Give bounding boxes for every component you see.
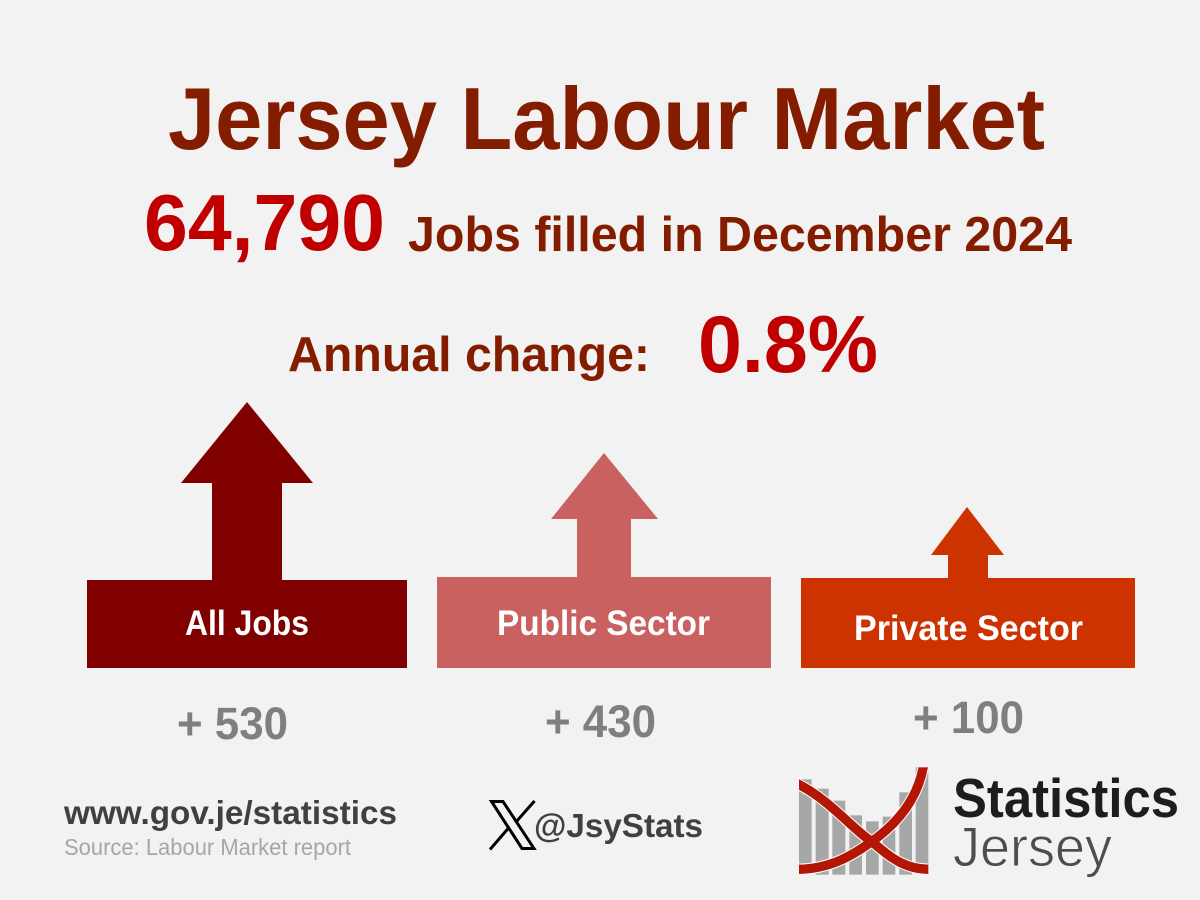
logo: Statistics Jersey (797, 765, 1179, 878)
annual change figure: 0.8% (698, 300, 878, 390)
title: Jersey Labour Market (168, 69, 1045, 168)
website link: www.gov.je/statistics (63, 794, 397, 831)
public sector label: Public Sector (497, 604, 710, 643)
private sector label: Private Sector (854, 609, 1083, 648)
logo word: Jersey: Jersey (953, 815, 1112, 878)
panel: private sector (801, 507, 1135, 743)
private sector value: + 100 (913, 692, 1024, 743)
jobs caption: Jobs filled in December 2024 (408, 208, 1072, 262)
all jobs label: All Jobs (185, 604, 309, 643)
logo word: Statistics: Statistics (953, 767, 1179, 829)
panel: all jobs (87, 402, 407, 749)
annual change (288, 300, 878, 390)
headline: jobs filled (144, 178, 1072, 267)
public sector box (437, 577, 771, 668)
private sector box (801, 578, 1135, 668)
all jobs value: + 530 (177, 698, 288, 749)
panel: public sector (437, 453, 771, 747)
all jobs box (87, 580, 407, 668)
twitter handle: @JsyStats (534, 807, 703, 844)
arrow: public sector up (551, 453, 658, 578)
source note: Source: Labour Market report (64, 834, 352, 860)
jobs figure: 64,790 (144, 178, 385, 267)
icon: X logo (490, 801, 534, 850)
public sector value: + 430 (545, 696, 656, 747)
annual change label: Annual change: (288, 328, 650, 382)
arrow: private sector up (931, 507, 1004, 579)
arrow: all jobs up (181, 402, 313, 581)
logo mark (797, 765, 930, 875)
